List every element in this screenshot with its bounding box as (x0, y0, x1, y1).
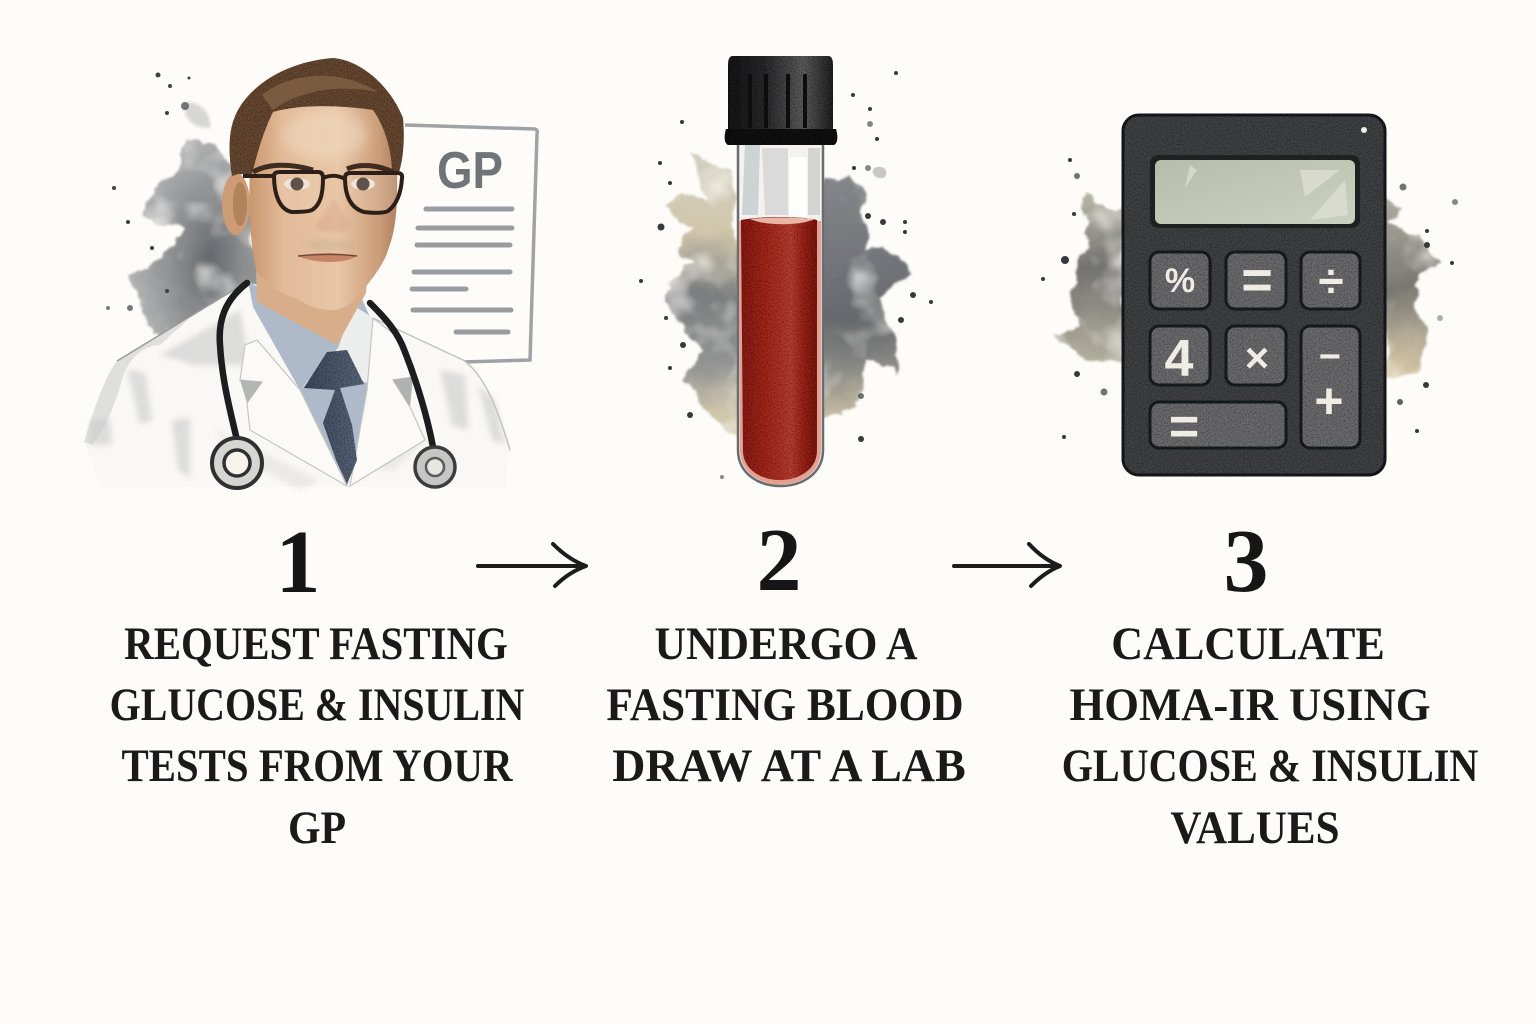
step 3 text: GLUCOSE & INSULIN (1062, 740, 1478, 792)
keypad: = (1169, 398, 1199, 456)
illustration: blood test tube (639, 56, 933, 486)
lapels (240, 340, 347, 486)
nose (315, 200, 352, 232)
keypad: ÷ (1318, 255, 1344, 307)
keypad: − (1319, 336, 1341, 378)
step 3 text: VALUES (1170, 802, 1340, 854)
keypad: % (1165, 262, 1195, 300)
watercolor splash behind tube (639, 71, 933, 479)
keypad: = (1241, 250, 1273, 310)
arrow: step 2 to 3 (954, 544, 1060, 586)
step 3 number: 3 (1224, 512, 1268, 611)
step 1 text (110, 618, 524, 854)
step 1 text: GLUCOSE & INSULIN (110, 679, 524, 731)
glasses (243, 172, 402, 213)
step 1 text: TESTS FROM YOUR (121, 740, 513, 792)
face (249, 102, 397, 310)
illustration: doctor with GP document (84, 58, 537, 490)
calculator body (1123, 115, 1385, 475)
step 3 text: CALCULATE (1111, 618, 1385, 670)
white coat (84, 280, 510, 490)
step 1 number: 1 (276, 513, 320, 612)
display (1150, 155, 1360, 228)
step 2 text: FASTING BLOOD (606, 679, 964, 731)
shirt (248, 280, 370, 390)
step 2 text (606, 618, 966, 792)
eyebrows (253, 165, 313, 172)
keypad: × (1245, 334, 1269, 381)
watercolor splash behind doctor (106, 72, 262, 457)
tie (304, 350, 364, 484)
arrow: step 1 to 2 (478, 544, 586, 586)
ears (222, 173, 250, 235)
step 2 text: DRAW AT A LAB (612, 740, 966, 792)
hair (230, 58, 404, 176)
illustration: calculator (1041, 115, 1458, 475)
keypad: + (1314, 373, 1344, 429)
step 3 text: HOMA-IR USING (1070, 679, 1430, 731)
step 1 text: GP (288, 802, 346, 854)
tube glass (738, 140, 823, 486)
watercolor splash behind calculator (1041, 158, 1458, 439)
step 3 text (1062, 618, 1478, 854)
GP document: GP (437, 142, 503, 200)
mouth (298, 253, 357, 262)
eyes (284, 178, 310, 190)
head (222, 58, 404, 345)
neck (256, 240, 370, 345)
GP document (385, 125, 537, 362)
keypad: 4 (1165, 330, 1194, 388)
keypad (1150, 250, 1360, 456)
step 2 number: 2 (756, 511, 802, 610)
cap (725, 56, 837, 145)
stethoscope (212, 283, 455, 488)
blood fill (739, 217, 821, 484)
step 1 text: REQUEST FASTING (124, 618, 508, 670)
step 2 text: UNDERGO A (655, 618, 917, 670)
